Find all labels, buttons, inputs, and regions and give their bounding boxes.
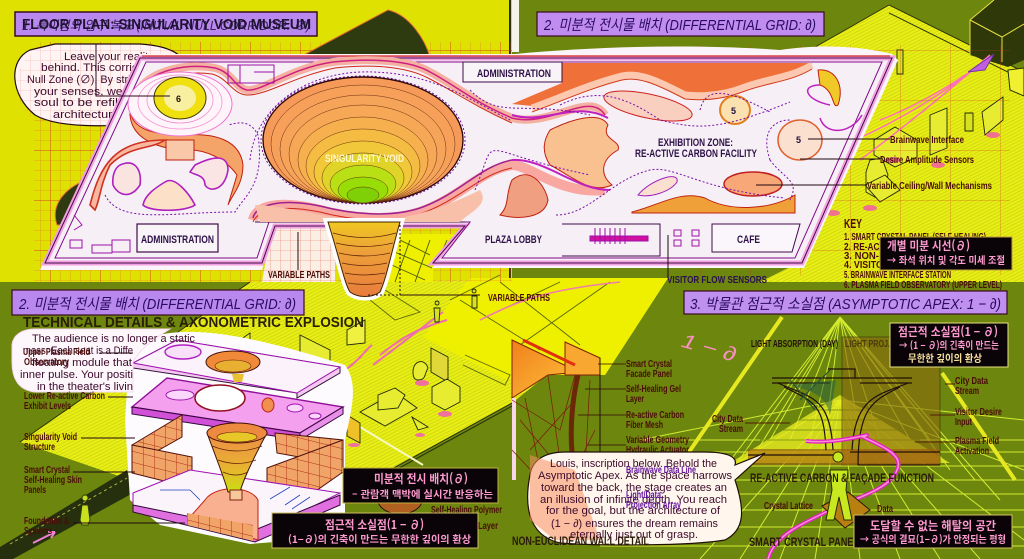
apex labels: Plasma Field — [955, 436, 999, 447]
exploded view labels: Smart Crystal — [24, 465, 70, 476]
variable paths dashed route — [368, 225, 480, 295]
callout: asymptotic apex: 점근적 소실점(1 − ∂) — [898, 323, 998, 340]
speech bubble: asymptotic apex — [528, 452, 765, 545]
polymer and layer labels: Self-Healing Polymer — [431, 505, 502, 516]
wall detail labels: Fiber Mesh — [626, 420, 663, 431]
leader lines and callouts: exhibition sensors: Variable Ceiling/Wall Mechanisms — [867, 181, 992, 192]
visitor flow sensors label: VISITOR FLOW SENSORS — [667, 275, 767, 286]
cafe room: CAFE — [737, 234, 760, 246]
cafe room — [712, 224, 800, 252]
callout: differential exhibit: – 관람객 맥박에 실시간 반응하는 — [352, 486, 493, 501]
callout: differential exhibit — [343, 468, 498, 503]
wall detail labels: Layer — [626, 394, 644, 405]
title header: floor plan: FLOOR PLAN: SINGULARITY VOID MUSEUM — [22, 16, 311, 33]
speech bubble: differential seats: floating module that — [32, 357, 132, 369]
administration room, top — [463, 62, 562, 82]
speech bubble: asymptotic apex: Brainwave Data Line — [626, 465, 696, 476]
callout: individual differential view — [880, 237, 1012, 270]
callout: unreachable space: 도달할 수 없는 해탈의 공간 — [870, 517, 996, 534]
callout: individual differential view: 개별 미분 시선(∂) — [887, 237, 970, 254]
exhibition zone label: EXHIBITION ZONE: — [658, 137, 733, 149]
speech bubble: differential seats: mass. Each seat is a Diffe — [23, 345, 133, 357]
speech bubble: asymptotic apex: Projection Array — [626, 500, 681, 511]
dark tube lower-left — [55, 180, 86, 225]
smart crystal panel heading: SMART CRYSTAL PANEL — [749, 535, 859, 549]
wall detail labels: Facade Panel — [626, 369, 672, 380]
speech bubble: asymptotic apex: (1 − ∂) ensures the dream remains — [551, 518, 718, 530]
speech bubble: asymptotic apex: an illusion of infinite depth. You reach — [540, 494, 727, 506]
speech bubble: asymptotic apex: for the goal, but the architecture of — [546, 505, 721, 517]
callout: asymptotic depth illusion — [272, 513, 478, 548]
speech bubble: null corridor: soul to be refilled by — [34, 97, 155, 109]
top-right isometric floor — [760, 0, 1024, 282]
header: differential grid, top right: 2. 미분적 전시물 배치 (DIFFERENTIAL GRID: ∂) — [543, 17, 816, 34]
header: asymptotic apex — [684, 291, 1007, 314]
panel: asymptotic apex perspective — [600, 317, 1024, 559]
speech bubble: differential seats: inner pulse. Your positi — [20, 369, 133, 381]
wall detail labels: Smart Crystal — [626, 359, 672, 370]
room 5 markers: 5 — [796, 135, 801, 145]
leader lines and callouts: exhibition sensors — [96, 44, 992, 278]
exploded axonometric diagram — [125, 332, 353, 544]
polymer and layer labels: Layer — [478, 521, 498, 532]
exploded view labels: Singularity Void — [24, 432, 77, 443]
wall detail labels: Re-active Carbon — [626, 410, 684, 421]
speech bubble: null corridor: Null Zone (∅). By stripping — [27, 74, 157, 86]
lower central wall — [253, 160, 605, 222]
singularity void funnel — [261, 76, 465, 296]
room 6 circular chamber: 6 — [176, 94, 181, 104]
upper slab: plasma observatory — [133, 340, 340, 398]
callout: asymptotic depth illusion: 점근적 소실점(1 − ∂) — [325, 516, 424, 533]
speech bubble: null corridor: architecture. — [53, 109, 123, 121]
dark tube behind plan — [300, 10, 430, 57]
visitor flow paths — [105, 72, 793, 215]
key legend — [844, 216, 1002, 291]
central isometric gallery floor — [20, 275, 668, 500]
base slab with foundation — [133, 470, 340, 542]
pale divider — [512, 398, 516, 480]
speech bubble: null corridor: your senses, we allow — [34, 86, 154, 98]
callout: asymptotic apex: → (1 − ∂)의 긴축이 만드는 — [899, 337, 999, 352]
bright unhatched lobby floor — [423, 278, 668, 380]
key legend: 4. VISITOR FLOW SENSORS — [844, 260, 964, 271]
pink plasma stream — [768, 435, 899, 559]
apex labels: Data — [877, 504, 893, 515]
speech bubble: asymptotic apex: Light/Data — [626, 490, 661, 501]
gallery floor furniture and visitor paths — [240, 282, 620, 447]
lower slab: re-active carbon levels — [132, 378, 343, 440]
top orange wall band — [512, 63, 812, 106]
exploded view labels: Exhibit Levels — [24, 401, 71, 412]
wall detail labels: Hydraulic Actuator — [626, 445, 689, 456]
room 5 markers: 5 — [731, 106, 736, 116]
wall detail labels — [578, 359, 689, 456]
visitor figure on crystal platform — [822, 452, 870, 528]
callout: unreachable space: → 공식의 결묘(1−∂)가 안정되는 평형 — [860, 531, 1006, 546]
title header: floor plan — [15, 12, 317, 36]
polymer and layer labels — [378, 486, 502, 532]
key legend: KEY — [844, 216, 862, 231]
wall detail labels: Self-Healing Gel — [626, 384, 681, 395]
leader lines and callouts: exhibition sensors: Brainwave Interface — [890, 135, 964, 146]
apex labels: Stream — [955, 386, 979, 397]
plaza lobby label: PLAZA LOBBY — [485, 234, 542, 246]
administration room, bottom: ADMINISTRATION — [141, 234, 214, 246]
variable paths label: VARIABLE PATHS — [268, 270, 330, 281]
orange upper facade — [512, 340, 579, 398]
plan white halo — [40, 47, 898, 270]
wireframe wall — [512, 375, 595, 480]
math annotation 1 - partial: 1 − ∂ — [679, 330, 739, 367]
header: differential grid, top right — [537, 12, 824, 36]
funnel section — [748, 369, 940, 465]
speech bubble: null corridor — [15, 44, 190, 127]
key legend: 5. BRAINWAVE INTERFACE STATION — [844, 270, 951, 281]
thick converging beams — [689, 317, 1015, 480]
apex labels: Activation — [955, 446, 989, 457]
speech bubble: asymptotic apex: toward the back, the stage creates an — [541, 482, 727, 494]
apex labels: LIGHT ABSORPTION (DAY) — [751, 339, 838, 350]
exploded view labels: Structure — [24, 442, 55, 453]
smart crystal walls — [132, 415, 343, 502]
room 6 circular chamber — [128, 72, 243, 205]
exploded view labels: Observatory — [24, 357, 69, 368]
red grid overlay, top-left field — [34, 42, 1010, 282]
exploded view labels — [23, 347, 185, 537]
exploded view labels: Self-Healing Skin — [24, 475, 82, 486]
top-right floor furniture and pink data streams — [826, 50, 1003, 216]
function heading: RE-ACTIVE CARBON & FAÇADE FUNCTION — [750, 471, 934, 485]
lower-left exhibits — [90, 140, 228, 210]
upper curving wall — [135, 60, 605, 123]
administration room, bottom — [137, 224, 218, 252]
speech bubble: null corridor: Leave your reality — [64, 51, 155, 63]
service rooms and stairs — [70, 65, 699, 256]
speech bubble: null corridor: behind. This corridor is — [41, 62, 162, 74]
speech bubble: asymptotic apex: Asymptotic Apex. As the space narrows — [538, 470, 733, 482]
room 5 markers — [731, 106, 801, 145]
apex labels — [712, 339, 1002, 515]
speech bubble: asymptotic apex: eternally just out of grasp. — [570, 529, 698, 541]
apex labels: Visitor Desire — [955, 407, 1002, 418]
callout: asymptotic apex: 무한한 깊이의 환상 — [908, 350, 982, 365]
exhibition zone label — [635, 137, 757, 160]
key legend: 3. NON-EUCLIDEAN WALL — [844, 251, 964, 262]
floor plan: singularity void museum — [40, 47, 898, 296]
apex labels: Input — [955, 417, 972, 428]
plan slab and outlines — [45, 56, 892, 263]
apex labels: Crystal Lattice — [764, 501, 813, 512]
callout: asymptotic depth illusion: (1−∂)의 긴축이 만드는 무한한 깊이의 환상 — [288, 531, 471, 546]
exhibition zone label: RE-ACTIVE CARBON FACILITY — [635, 148, 757, 160]
central singularity cone — [207, 423, 267, 500]
exploded view labels: Foundation & — [24, 516, 69, 527]
variable paths label, lower: VARIABLE PATHS — [488, 293, 550, 304]
speech bubble: asymptotic apex: Louis, inscription below. Behold the — [550, 458, 717, 470]
non-euclidean wall section — [512, 340, 600, 480]
perspective rays — [600, 317, 1024, 559]
callout: individual differential view: → 좌석 위치 및 각도 미세 조절 — [887, 252, 1005, 267]
exploded view labels: Lower Re-active Carbon — [24, 391, 105, 402]
leader lines and callouts: exhibition sensors: Desire Amplitude Sensors — [880, 155, 974, 166]
speech bubble: differential seats: in the theater's livin — [37, 381, 133, 393]
speech bubble: differential seats — [12, 329, 195, 393]
callout: unreachable space — [854, 515, 1012, 548]
blob walls, exhibition zone — [500, 70, 862, 217]
heading: technical details: TECHNICAL DETAILS & AXONOMETRIC EXPLOSION — [23, 314, 364, 331]
exploded view labels: Systems — [24, 526, 52, 537]
notch under plan: pale grid court — [262, 226, 465, 282]
exploded view labels: Upper Plasma Field — [23, 347, 90, 358]
title header: floor plan: 1. 특이점의 입구 복도 (INITIAL NULL CORRIDOR: ∅) — [22, 18, 310, 33]
apex labels: City Data — [712, 414, 743, 425]
wall detail labels: Variable Geometry — [626, 435, 689, 446]
callout: asymptotic apex — [890, 323, 1008, 367]
exploded view labels: Panels — [24, 485, 46, 496]
dark entry tube with figure — [0, 470, 133, 559]
apex labels: City Data — [955, 376, 988, 387]
white halo — [125, 332, 353, 544]
key legend: 2. RE-ACTIVE CARBON FIBER — [844, 242, 965, 253]
header: differential grid, lower left: 2. 미분적 전시물 배치 (DIFFERENTIAL GRID: ∂) — [18, 296, 296, 313]
brown structure panel — [842, 337, 940, 465]
header: differential grid, lower left — [12, 290, 304, 315]
speech bubble: differential seats: The audience is no longer a static — [32, 333, 195, 345]
callout: differential exhibit: 미분적 전시 배치(∂) — [374, 470, 468, 487]
administration room, top: ADMINISTRATION — [477, 68, 551, 80]
wall detail heading: NON-EUCLIDEAN WALL DETAIL — [512, 534, 649, 548]
apex labels: Stream — [719, 424, 743, 435]
singularity void funnel: SINGULARITY VOID — [325, 153, 404, 165]
apex labels: LIGHT PROJ. — [845, 339, 890, 350]
